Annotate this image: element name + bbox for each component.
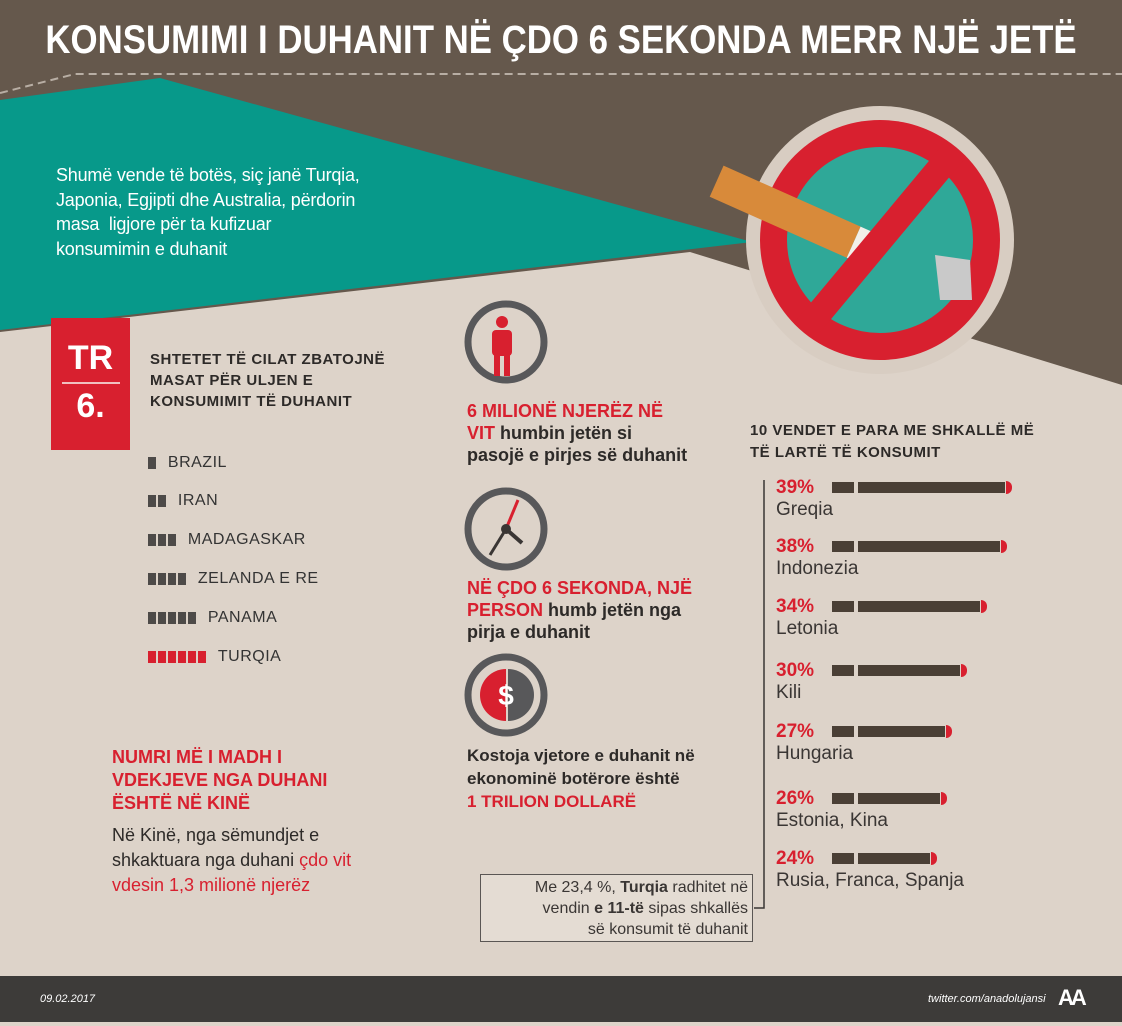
stat 1 text: 6 MILIONË NJERËZ NË <box>467 401 663 421</box>
text: BRAZIL <box>168 454 227 471</box>
stat 3 text: ekonominë botërore është <box>467 769 680 788</box>
bar chart: 27% <box>776 721 814 742</box>
chart heading: 10 VENDET E PARA ME SHKALLË MË <box>750 422 1034 439</box>
list heading: KONSUMIMIT TË DUHANIT <box>150 393 352 410</box>
China heading: VDEKJEVE NGA DUHANI <box>112 770 327 790</box>
title: KONSUMIMI I DUHANIT NË ÇDO 6 SEKONDA MERR NJË JETË <box>45 18 1077 62</box>
bar chart: Letonia <box>776 618 838 639</box>
list: countries <box>148 454 319 665</box>
icon: clock <box>464 488 548 570</box>
China text: vdesin 1,3 milionë njerëz <box>112 875 310 895</box>
stat 2 text: PERSON humb jetën nga <box>467 600 681 620</box>
China text: Në Kinë, nga sëmundjet e <box>112 825 319 845</box>
stat 3 text <box>467 746 695 811</box>
stat 2 text <box>467 578 692 642</box>
bar chart: 24% <box>776 848 814 869</box>
badge: TR 6. <box>51 318 130 450</box>
stat 3 text: Kostoja vjetore e duhanit në <box>467 746 695 765</box>
bar chart: Greqia <box>776 499 833 520</box>
text: MADAGASKAR <box>188 531 306 548</box>
intro text: Japonia, Egjipti dhe Australia, përdorin <box>56 190 355 210</box>
bar chart: Kili <box>776 682 801 703</box>
list heading <box>150 351 385 410</box>
bar chart: 26% <box>776 788 814 809</box>
footer twitter: twitter.com/anadolujansi <box>928 993 1046 1005</box>
callout: Turkey rank: Me 23,4 %, Turqia radhitet në <box>535 879 748 896</box>
bar chart: 38% <box>776 536 814 557</box>
China heading: ËSHTË NË KINË <box>112 793 250 813</box>
bar chart: Hungaria <box>776 743 853 764</box>
callout: Turkey rank: së konsumit të duhanit <box>588 921 748 938</box>
callout: Turkey rank: vendin e 11-të sipas shkallës <box>543 900 748 917</box>
chart bracket line <box>754 480 765 909</box>
bar chart: 30% <box>776 660 814 681</box>
list heading: MASAT PËR ULJEN E <box>150 372 313 389</box>
icon: dollar <box>464 654 548 736</box>
text: IRAN <box>178 492 218 509</box>
chart heading: TË LARTË TË KONSUMIT <box>750 444 941 461</box>
bar chart: 39% <box>776 477 814 498</box>
footer date: 09.02.2017 <box>40 993 95 1005</box>
chart heading <box>750 422 1034 461</box>
intro text: masa ligjore për ta kufizuar <box>56 214 271 234</box>
badge: TR 6.: TR <box>68 339 113 377</box>
stat 1 text: VIT humbin jetën si <box>467 423 632 443</box>
footer <box>0 976 1122 1022</box>
callout: Turkey rank <box>480 874 753 942</box>
icon: smoker <box>464 300 548 384</box>
bar chart: 34% <box>776 596 814 617</box>
China text <box>112 825 351 895</box>
badge: TR 6.: 6. <box>76 387 105 425</box>
logo: AA: AA <box>1058 985 1084 1010</box>
stat 1 text: pasojë e pirjes së duhanit <box>467 445 687 465</box>
stat 2 text: NË ÇDO 6 SEKONDA, NJË <box>467 578 692 598</box>
bar chart: Estonia, Kina <box>776 810 888 831</box>
icon: dollar: $ <box>498 680 514 711</box>
China heading <box>112 747 327 813</box>
text: ZELANDA E RE <box>198 570 319 587</box>
intro text: konsumimin e duhanit <box>56 238 227 258</box>
bar chart: Rusia, Franca, Spanja <box>776 870 964 891</box>
bar chart: Indonezia <box>776 558 858 579</box>
China heading: NUMRI MË I MADH I <box>112 747 282 767</box>
China text: shkaktuara nga duhani çdo vit <box>112 850 351 870</box>
intro text: Shumë vende të botës, siç janë Turqia, <box>56 165 360 185</box>
icon: no smoking sign <box>710 106 1014 360</box>
list heading: SHTETET TË CILAT ZBATOJNË <box>150 351 385 368</box>
stat 1 text <box>467 401 687 465</box>
intro text <box>56 165 360 258</box>
text: PANAMA <box>208 609 277 626</box>
text: TURQIA <box>218 648 281 665</box>
stat 3 text: 1 TRILION DOLLARË <box>467 792 636 811</box>
stat 2 text: pirja e duhanit <box>467 622 590 642</box>
